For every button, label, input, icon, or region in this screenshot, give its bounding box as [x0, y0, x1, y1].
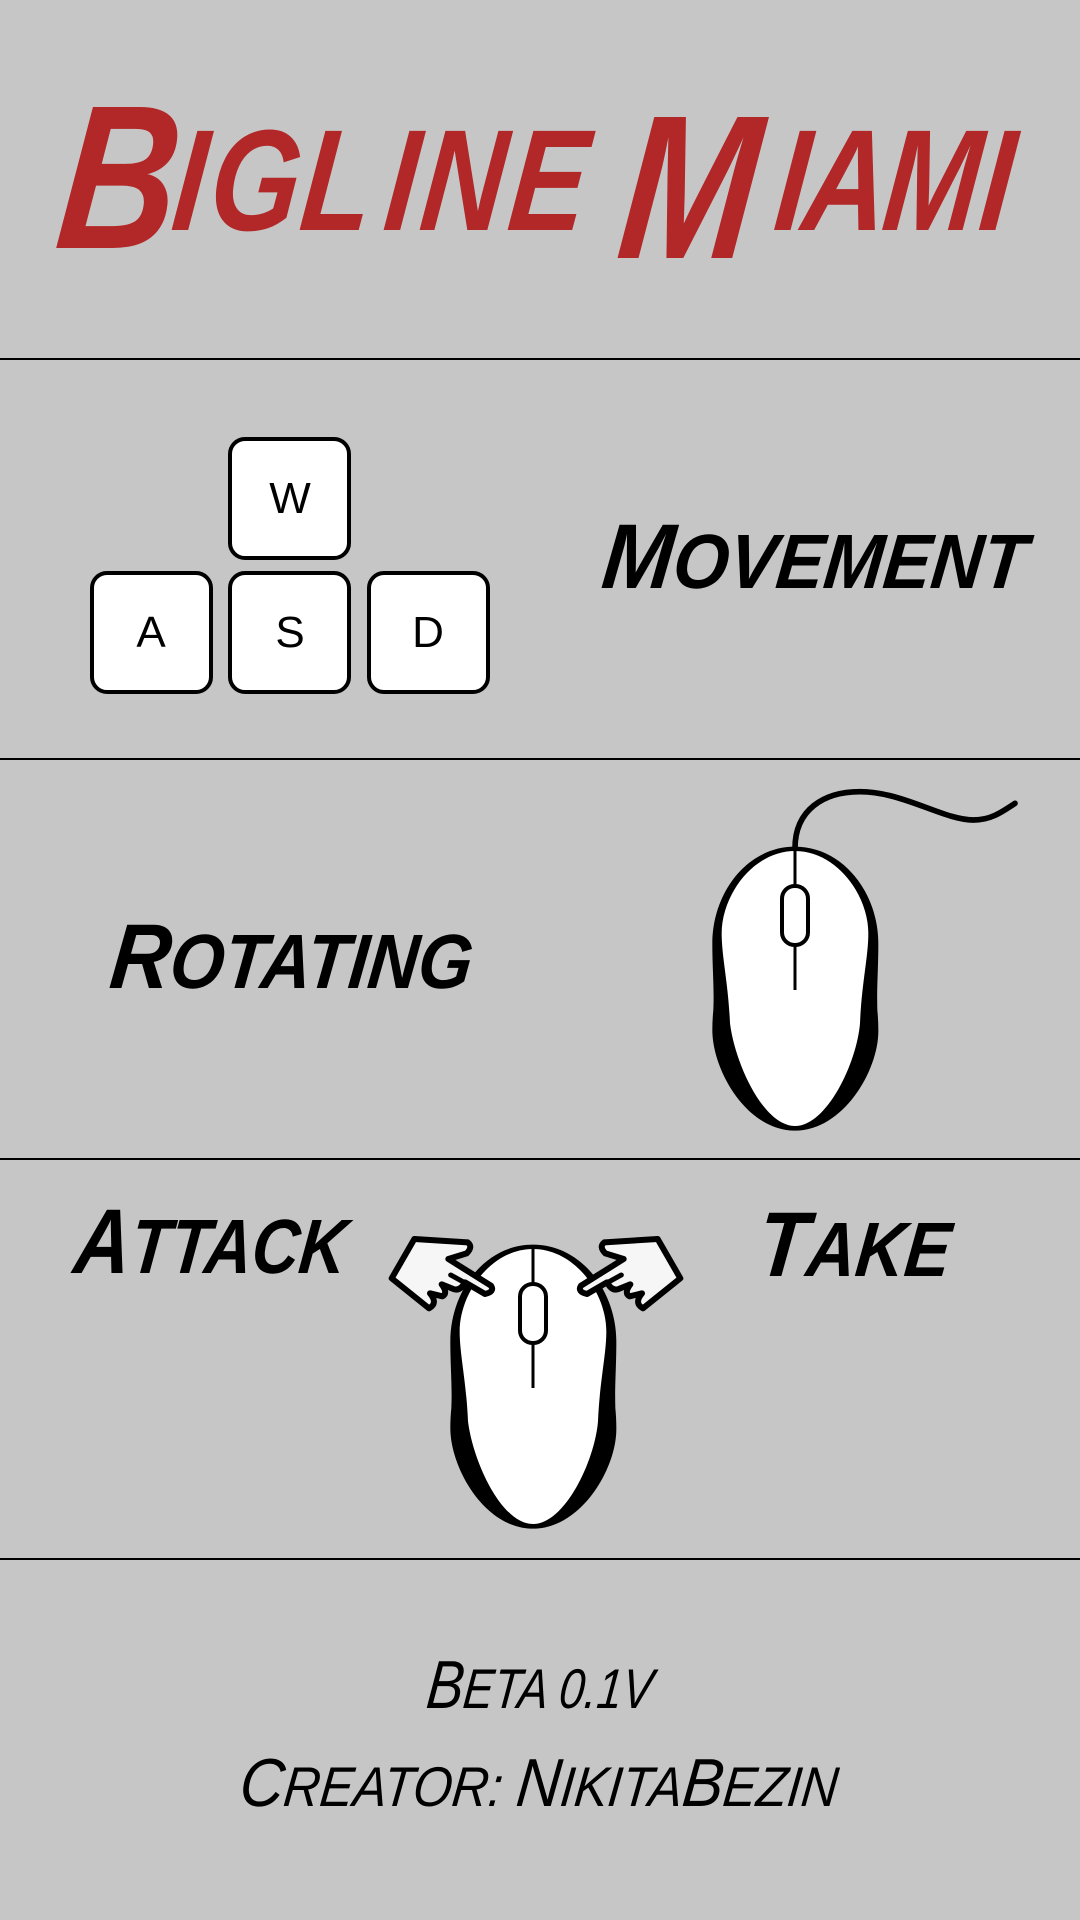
key D: D — [412, 608, 444, 657]
title: A — [794, 100, 897, 261]
title: M — [610, 73, 774, 302]
icon: mouse — [450, 1245, 616, 1529]
key A: A — [136, 608, 166, 657]
key S — [230, 573, 349, 692]
icon: mouse with cable — [712, 792, 1015, 1131]
label: rotating: ROTATING — [106, 904, 479, 1008]
keyboard keys WASD — [92, 439, 488, 692]
title: G — [203, 100, 310, 261]
panel: movement — [92, 439, 1038, 692]
creator text: CREATOR: NIKITABEZIN — [236, 1745, 843, 1821]
title: B — [49, 63, 191, 292]
icon: left pointing hand — [392, 1239, 492, 1308]
key S: S — [275, 608, 305, 657]
label: movement: MOVEMENT — [598, 504, 1038, 608]
panel: rotating — [106, 792, 1015, 1131]
title — [48, 63, 1029, 302]
panel: attack and take — [68, 1189, 959, 1529]
title: N — [414, 100, 517, 261]
key W — [230, 439, 349, 558]
version text: BETA 0.1V — [423, 1647, 661, 1723]
label: take: TAKE — [753, 1192, 959, 1296]
label: attack: ATTACK — [68, 1189, 357, 1293]
icon: right pointing hand — [580, 1239, 680, 1308]
title: I — [378, 100, 430, 261]
key A — [92, 573, 211, 692]
panel: credits — [236, 1647, 843, 1821]
title: E — [502, 100, 599, 261]
key W: W — [269, 474, 311, 523]
title: I — [769, 100, 820, 261]
title: M — [877, 100, 992, 261]
title: L — [294, 100, 382, 261]
title: I — [974, 100, 1025, 261]
key D — [369, 573, 488, 692]
title: I — [166, 100, 218, 261]
